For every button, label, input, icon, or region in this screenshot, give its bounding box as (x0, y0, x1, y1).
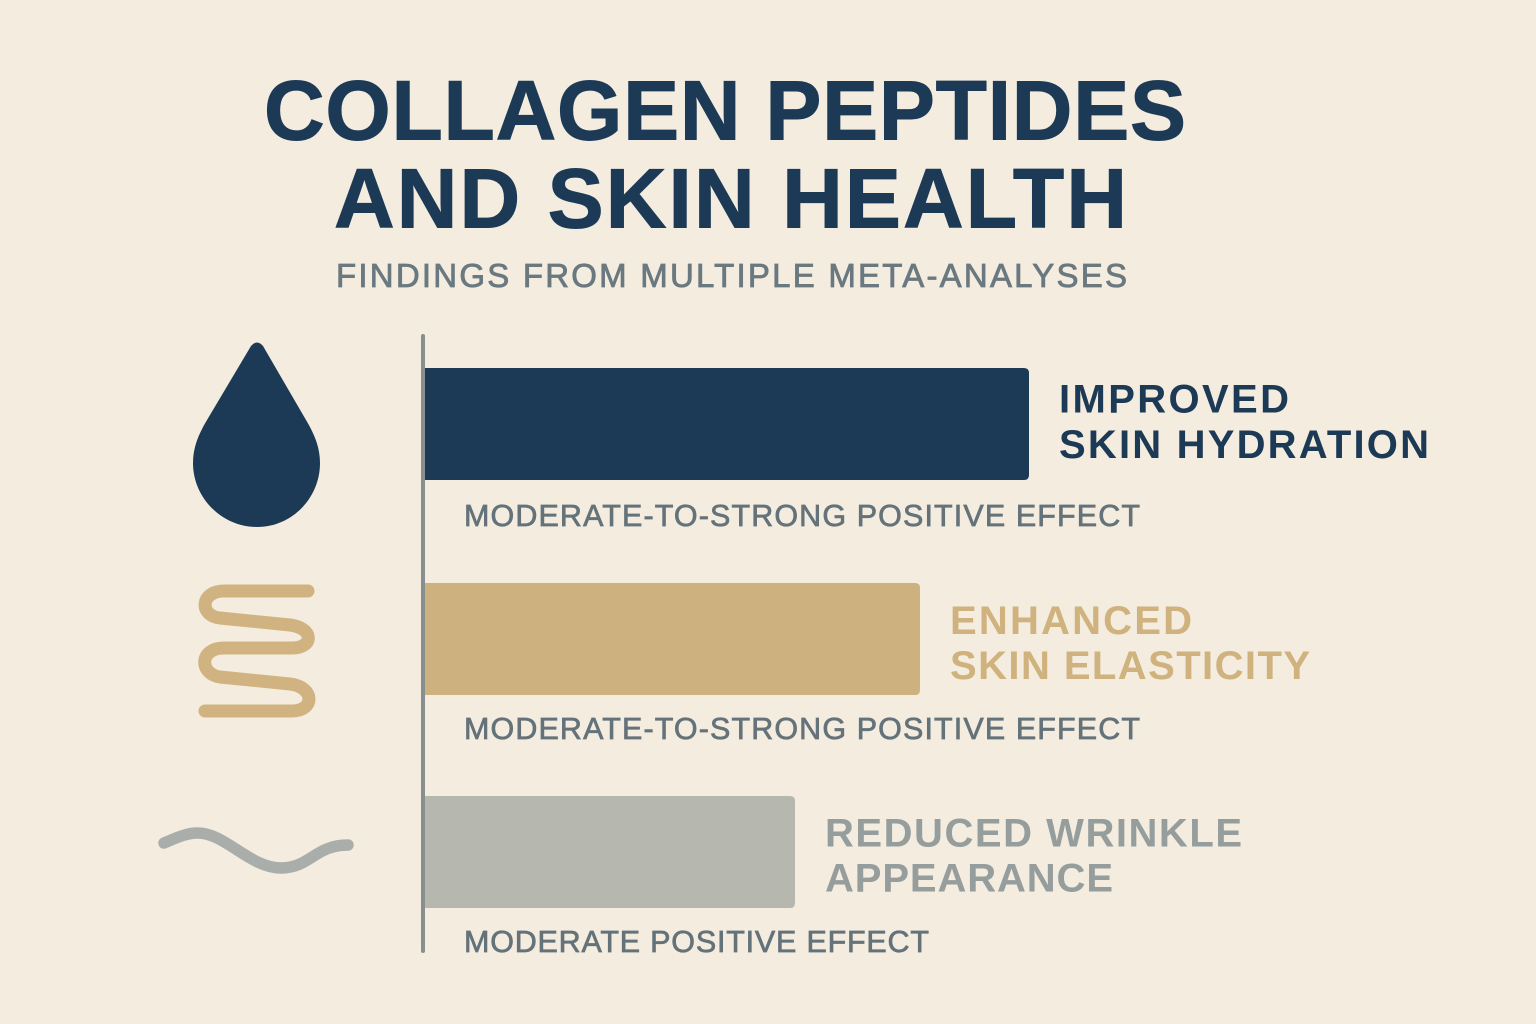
bar: improved skin hydration (425, 368, 1029, 480)
icon: wrinkle line (164, 833, 348, 868)
bar: reduced wrinkle appearance (425, 796, 795, 908)
label: enhanced skin elasticity (950, 599, 1310, 688)
label: improved skin hydration: IMPROVED (1059, 378, 1289, 422)
icon: water drop (193, 342, 320, 527)
title: COLLAGEN PEPTIDES (264, 64, 1186, 158)
label: reduced wrinkle appearance: REDUCED WRINKLE (825, 812, 1242, 856)
bar: enhanced skin elasticity (425, 583, 920, 695)
label: enhanced skin elasticity: SKIN ELASTICITY (950, 644, 1310, 688)
title (264, 64, 1186, 246)
effect caption: hydration: MODERATE-TO-STRONG POSITIVE EFFECT (464, 499, 1140, 533)
icon: elastic wave (205, 591, 309, 711)
label: improved skin hydration (1059, 378, 1429, 467)
label: reduced wrinkle appearance: APPEARANCE (825, 856, 1113, 900)
label: improved skin hydration: SKIN HYDRATION (1059, 423, 1429, 467)
effect caption: wrinkles: MODERATE POSITIVE EFFECT (464, 925, 929, 959)
subtitle: FINDINGS FROM MULTIPLE META-ANALYSES (336, 257, 1127, 294)
label: reduced wrinkle appearance (825, 812, 1242, 900)
title: AND SKIN HEALTH (334, 152, 1127, 246)
effect caption: elasticity: MODERATE-TO-STRONG POSITIVE EFFECT (464, 712, 1140, 746)
axis line (421, 334, 425, 953)
label: enhanced skin elasticity: ENHANCED (950, 599, 1192, 643)
